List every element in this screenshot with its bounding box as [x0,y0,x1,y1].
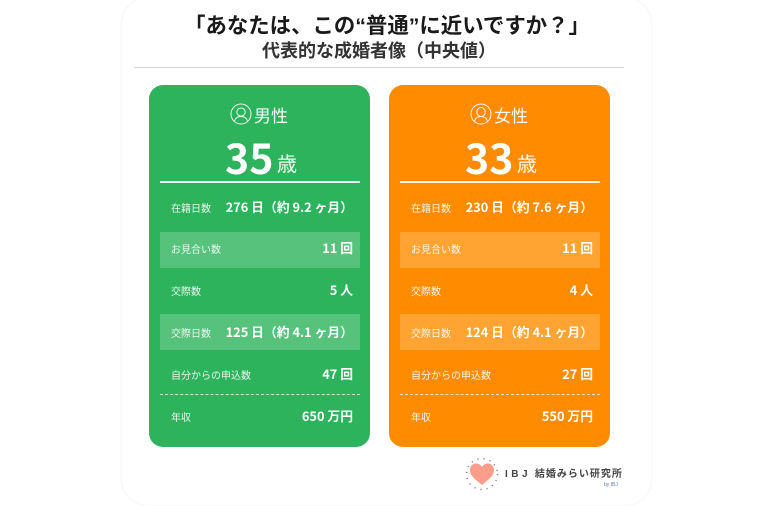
row: dating days value: 124 日（約 4.1 ヶ月） [466,322,593,341]
row highlight: meetings [160,232,360,268]
icon: heart with dotted ring [466,458,498,490]
row: self applications value: 47 回 [322,364,353,383]
row: meetings value: 11 回 [322,238,353,257]
panel: female [389,85,610,447]
panel: male [149,85,370,447]
row: dating days value: 125 日（約 4.1 ヶ月） [226,322,353,341]
row: self applications label: 自分からの申込数 [171,367,251,382]
row: self applications value: 27 回 [562,364,593,383]
row: days enrolled value: 230 日（約 7.6 ヶ月） [466,197,593,216]
logo: IBJ research institute [466,458,623,490]
subtitle: 代表的な成婚者像（中央値） [262,41,496,61]
row: dating days label: 交際日数 [411,325,451,340]
row: dating count label: 交際数 [171,283,201,298]
row: self applications label: 自分からの申込数 [411,367,491,382]
row: dating count label: 交際数 [411,283,441,298]
row highlight: meetings [400,232,600,268]
title: 「あなたは、この“普通”に近いですか？」 [184,14,590,38]
row: meetings label: お見合い数 [171,241,221,256]
row: days enrolled label: 在籍日数 [171,200,211,215]
gender label: female: 女性 [494,102,528,127]
icon: female person [470,104,492,124]
age unit: 歳 [277,148,297,177]
row: days enrolled value: 276 日（約 9.2 ヶ月） [226,197,353,216]
row highlight: dating days [400,314,600,350]
logo small by-line: by IBJ [604,482,618,488]
gender label: male: 男性 [254,102,288,127]
row: meetings value: 11 回 [562,238,593,257]
row: days enrolled label: 在籍日数 [411,200,451,215]
row: meetings label: お見合い数 [411,241,461,256]
age: 35: 35 [225,126,273,186]
row: dating days label: 交際日数 [171,325,211,340]
row: income value: 650 万円 [302,406,353,425]
row: dating count value: 5 人 [330,280,353,299]
row: income label: 年収 [171,409,191,424]
icon: male person [230,104,252,124]
background sheet [122,0,651,505]
row: income value: 550 万円 [542,406,593,425]
age: 33: 33 [465,126,513,186]
row highlight: dating days [160,314,360,350]
row: income label: 年収 [411,409,431,424]
row: dating count value: 4 人 [570,280,593,299]
age unit: 歳 [517,148,537,177]
logo text: IBJ 結婚みらい研究所 [505,469,623,480]
